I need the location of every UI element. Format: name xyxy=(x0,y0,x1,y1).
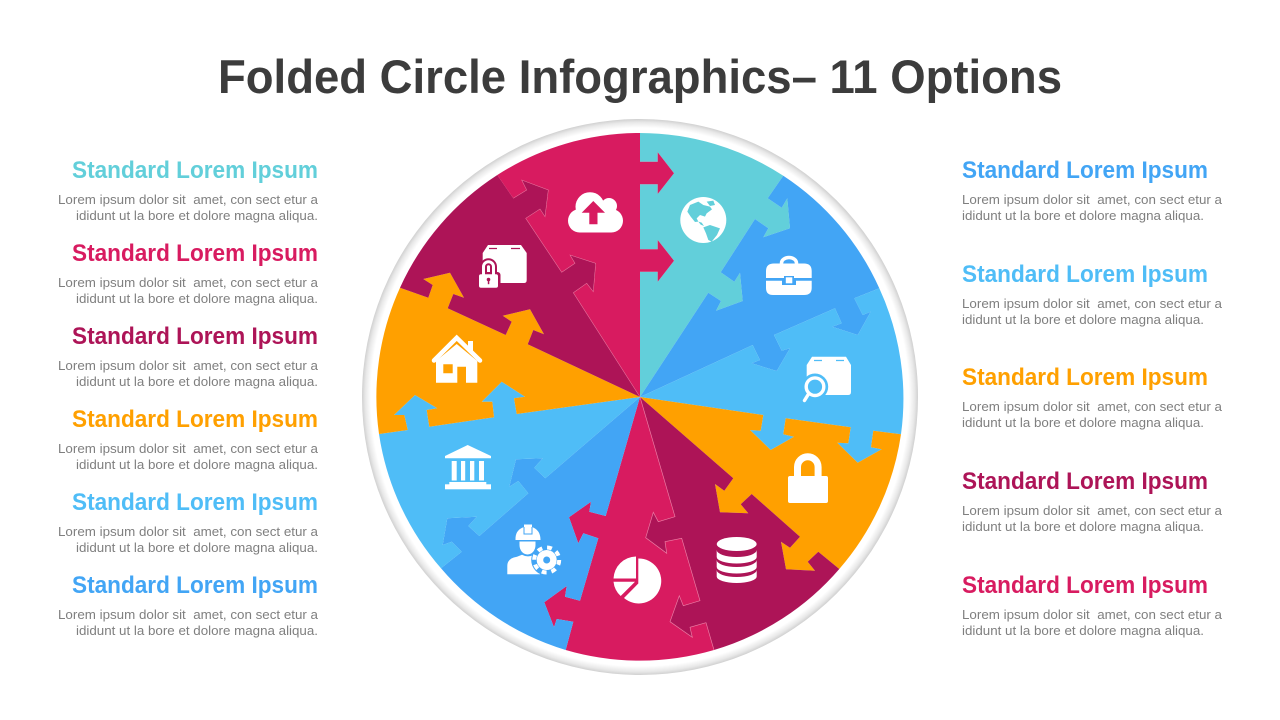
icon: toolbox xyxy=(766,258,812,295)
segment: red bottom xyxy=(544,397,714,661)
left item 5: Standard Lorem Ipsum xyxy=(72,489,318,516)
left item 3: ididunt ut la bore et dolore magna aliqua. xyxy=(76,374,318,389)
icon: cloud upload xyxy=(568,192,623,232)
folded circle chart xyxy=(376,133,903,661)
left text column xyxy=(58,157,319,638)
icon: database xyxy=(717,537,757,583)
left item 2 xyxy=(58,240,319,306)
right item 2 xyxy=(962,261,1223,327)
segment: blue upper right xyxy=(640,176,879,397)
right item 2: ididunt ut la bore et dolore magna aliqua. xyxy=(962,312,1204,327)
segment: orange right xyxy=(640,397,901,571)
left item 4: Standard Lorem Ipsum xyxy=(72,406,318,433)
right item 5: Standard Lorem Ipsum xyxy=(962,572,1208,599)
right item 4: Lorem ipsum dolor sit amet, con sect etur a xyxy=(962,503,1223,518)
right item 4 xyxy=(962,468,1223,534)
icon: box with magnifier xyxy=(802,357,851,400)
left item 3 xyxy=(58,323,319,389)
segment: red top xyxy=(497,133,674,397)
segment: light blue right xyxy=(640,288,903,463)
icon: bank building xyxy=(445,445,491,489)
segment: purple bottom xyxy=(640,397,839,650)
right item 4: Standard Lorem Ipsum xyxy=(962,468,1208,495)
right item 3: Standard Lorem Ipsum xyxy=(962,364,1208,391)
left item 4: Lorem ipsum dolor sit amet, con sect etur a xyxy=(58,441,319,456)
left item 1: ididunt ut la bore et dolore magna aliqua. xyxy=(76,208,318,223)
icon: box with padlock xyxy=(476,245,527,290)
left item 1 xyxy=(58,157,319,223)
left item 3: Lorem ipsum dolor sit amet, con sect etur a xyxy=(58,358,319,373)
left item 1: Lorem ipsum dolor sit amet, con sect etur a xyxy=(58,192,319,207)
right item 3: Lorem ipsum dolor sit amet, con sect etur a xyxy=(962,399,1223,414)
left item 1: Standard Lorem Ipsum xyxy=(72,157,318,184)
left item 6: Lorem ipsum dolor sit amet, con sect etur a xyxy=(58,607,319,622)
segment: purple top xyxy=(400,175,640,397)
left item 2: Lorem ipsum dolor sit amet, con sect etur a xyxy=(58,275,319,290)
left item 4: ididunt ut la bore et dolore magna aliqua. xyxy=(76,457,318,472)
right item 3: ididunt ut la bore et dolore magna aliqua. xyxy=(962,415,1204,430)
icon: engineer with gear xyxy=(507,524,562,576)
left item 6: ididunt ut la bore et dolore magna aliqua. xyxy=(76,623,318,638)
right item 4: ididunt ut la bore et dolore magna aliqua. xyxy=(962,519,1204,534)
right item 1 xyxy=(962,157,1223,223)
left item 2: ididunt ut la bore et dolore magna aliqua. xyxy=(76,291,318,306)
icon: pie chart xyxy=(614,556,661,603)
right item 3 xyxy=(962,364,1223,430)
segment: orange left xyxy=(376,273,640,434)
right item 1: Lorem ipsum dolor sit amet, con sect etur a xyxy=(962,192,1223,207)
segment: blue lower left xyxy=(441,397,640,650)
segment: teal xyxy=(640,133,790,397)
left item 5: Lorem ipsum dolor sit amet, con sect etur a xyxy=(58,524,319,539)
left item 4 xyxy=(58,406,319,472)
right item 5: ididunt ut la bore et dolore magna aliqua. xyxy=(962,623,1204,638)
left item 2: Standard Lorem Ipsum xyxy=(72,240,318,267)
right item 5 xyxy=(962,572,1223,638)
outer ring xyxy=(362,119,918,675)
left item 6 xyxy=(58,572,319,638)
icon: globe xyxy=(680,197,726,243)
right item 1: Standard Lorem Ipsum xyxy=(962,157,1208,184)
right item 1: ididunt ut la bore et dolore magna aliqua. xyxy=(962,208,1204,223)
right item 2: Lorem ipsum dolor sit amet, con sect etur a xyxy=(962,296,1223,311)
title: Folded Circle Infographics– 11 Options xyxy=(218,50,1062,103)
left item 3: Standard Lorem Ipsum xyxy=(72,323,318,350)
left item 6: Standard Lorem Ipsum xyxy=(72,572,318,599)
left item 5 xyxy=(58,489,319,555)
icon: padlock xyxy=(788,457,828,503)
right item 2: Standard Lorem Ipsum xyxy=(962,261,1208,288)
right text column xyxy=(962,157,1223,638)
left item 5: ididunt ut la bore et dolore magna aliqua. xyxy=(76,540,318,555)
right item 5: Lorem ipsum dolor sit amet, con sect etur a xyxy=(962,607,1223,622)
segment: light blue left xyxy=(379,382,640,568)
icon: house xyxy=(434,338,480,383)
